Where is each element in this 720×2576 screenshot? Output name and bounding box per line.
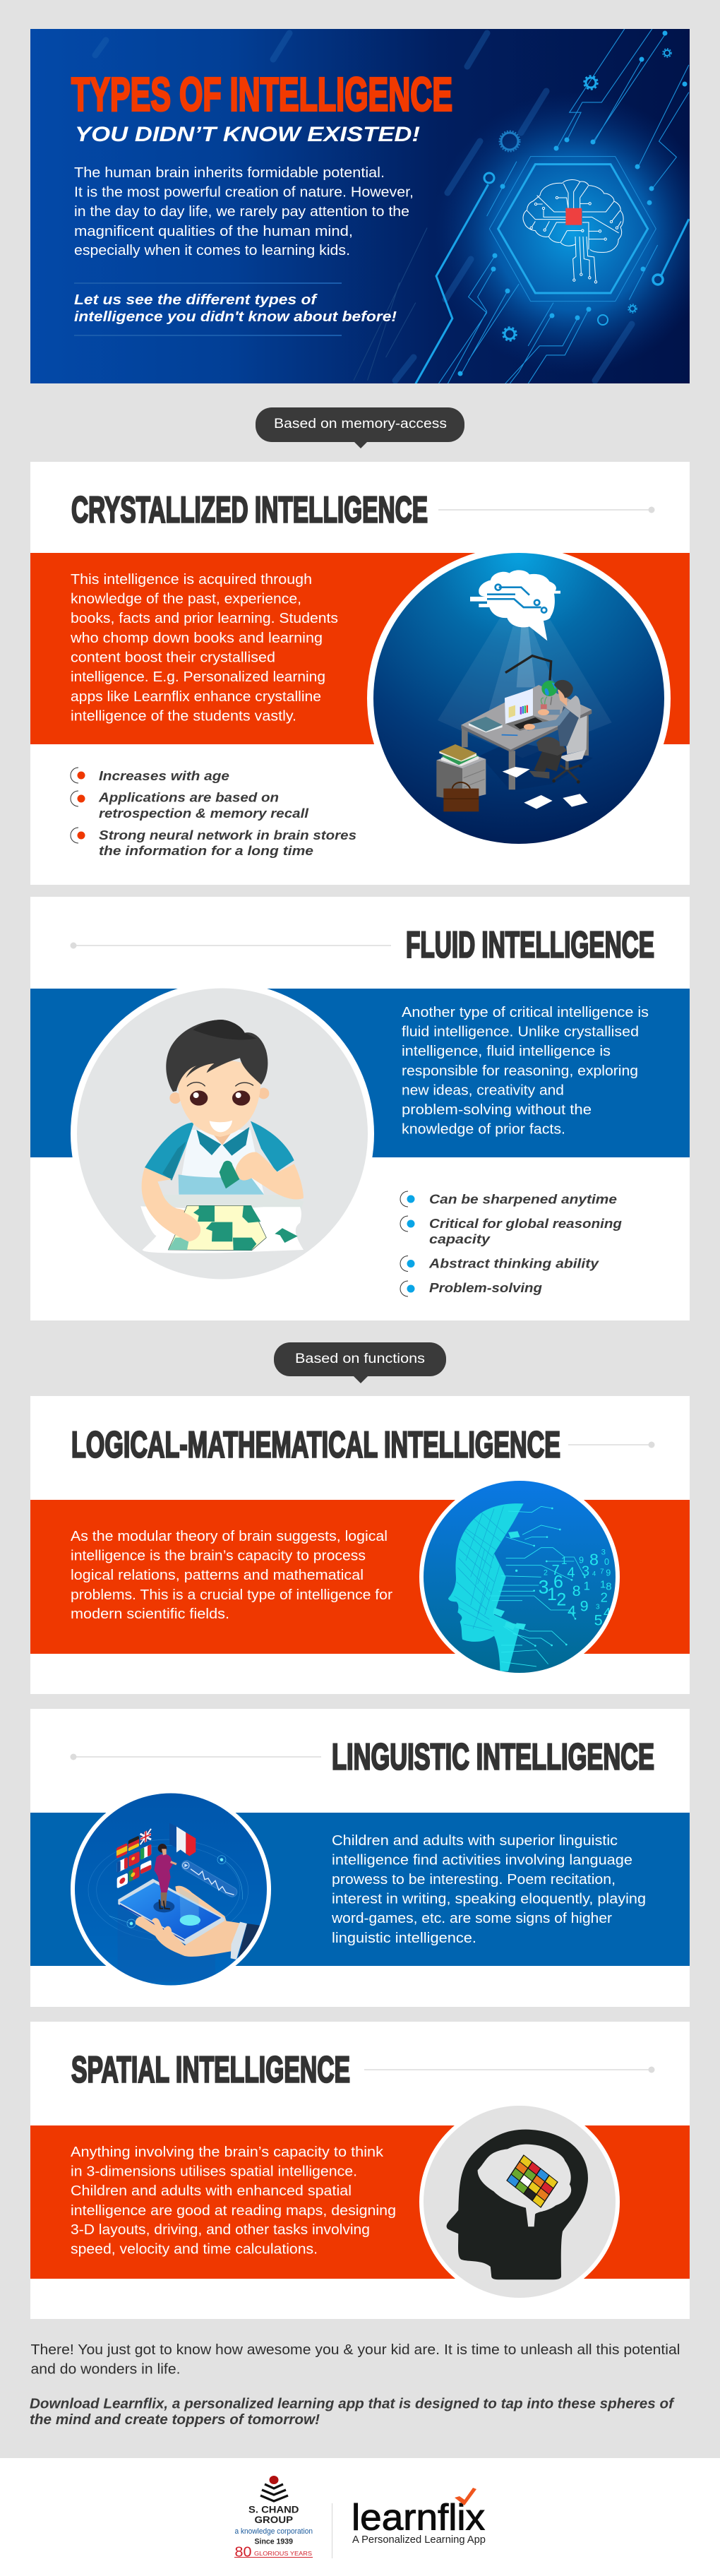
closing text: There! You just got to know how awesome you & your kid are. It is time to unleash all this potential	[31, 2342, 680, 2358]
bullet list: the information for a long time	[99, 843, 313, 858]
briefcase	[452, 782, 470, 789]
hexagon frames	[489, 157, 656, 302]
logo: S. Chand Group: Since 1939	[254, 2538, 293, 2546]
numbers: 8	[589, 1551, 599, 1569]
pill: based on functions	[274, 1342, 446, 1383]
bullet list: Strong neural network in brain stores	[99, 828, 356, 842]
description text: prowess to be interesting. Poem recitation,	[332, 1872, 616, 1888]
description text: intelligence. E.g. Personalized learning	[71, 669, 325, 685]
description text: interest in writing, speaking eloquently, playing	[332, 1892, 646, 1907]
description text: Children and adults with enhanced spatial	[71, 2183, 352, 2199]
description text: intelligence are good at reading maps, designing	[71, 2203, 396, 2219]
student	[539, 751, 558, 772]
bullet list: retrospection & memory recall	[99, 806, 309, 821]
numbers: 8	[606, 1581, 612, 1593]
bullet list: Problem-solving	[429, 1280, 542, 1295]
description text: speed, velocity and time calculations.	[71, 2242, 318, 2258]
laptop	[505, 715, 551, 731]
desk	[462, 715, 589, 789]
bullet list: Abstract thinking ability	[428, 1256, 600, 1271]
description text: responsible for reasoning, exploring	[402, 1063, 638, 1079]
chair	[553, 765, 581, 782]
description text: As the modular theory of brain suggests, logical	[71, 1529, 388, 1544]
numbers: 2	[544, 1569, 548, 1578]
numbers: 4	[567, 1565, 575, 1580]
logo: S. Chand Group: S. CHAND	[248, 2505, 299, 2515]
description text: Children and adults with superior linguistic	[332, 1833, 618, 1849]
numbers: 1	[561, 1555, 567, 1567]
heading: types of intelligence: TYPES OF INTELLIGENCE	[71, 68, 452, 121]
bullet list: capacity	[429, 1232, 491, 1246]
panel: linguistic intelligence	[30, 1709, 690, 2007]
footer: logos	[0, 2458, 720, 2576]
logo: Learnflix: A Personalized Learning App	[352, 2534, 486, 2546]
papers	[503, 767, 588, 809]
description text	[331, 1833, 646, 1946]
illustration: boy solving puzzle	[71, 982, 374, 1285]
description text: linguistic intelligence.	[332, 1931, 476, 1946]
numbers: 4	[592, 1570, 596, 1578]
description text: Another type of critical intelligence is	[402, 1005, 649, 1020]
numbers: 1	[547, 1585, 557, 1604]
pill: based on memory-access: Based on memory-access	[274, 417, 447, 431]
orange band	[30, 2125, 690, 2279]
logo: S. Chand Group: GROUP	[254, 2515, 293, 2525]
hero circuit artwork	[95, 29, 689, 383]
numbers: 3	[601, 1549, 606, 1557]
orange band	[30, 1500, 690, 1654]
logo: Learnflix: learnflix	[352, 2498, 485, 2539]
description text: problems. This is a crucial type of intelligence for	[71, 1587, 392, 1603]
bullet list: Critical for global reasoning	[429, 1216, 622, 1231]
description text: word-games, etc. are some signs of higher	[331, 1911, 612, 1926]
bullet list	[400, 1191, 622, 1296]
description text: This intelligence is acquired through	[71, 572, 312, 588]
description text	[71, 1529, 392, 1622]
numbers: 1	[584, 1580, 590, 1593]
numbers	[539, 1549, 612, 1629]
panel: spatial intelligence	[30, 2022, 690, 2319]
hero intro text: in the day to day life, we rarely pay attention to the	[74, 204, 409, 220]
description text	[71, 2145, 396, 2258]
audio pill	[186, 1866, 232, 1892]
closing text	[30, 2342, 680, 2428]
puzzle	[168, 1205, 266, 1251]
blue band	[30, 989, 690, 1157]
hero intro text: It is the most powerful creation of nature. However,	[74, 185, 414, 201]
pill: based on functions: Based on functions	[295, 1352, 425, 1366]
description text	[70, 572, 338, 724]
numbers: 7	[552, 1563, 560, 1578]
hero call to action: Let us see the different types of	[74, 292, 318, 308]
numbers: 1	[600, 1578, 606, 1590]
numbers: 5	[594, 1611, 603, 1629]
illustration: head silhouette with puzzle cube	[419, 2101, 620, 2302]
hero call to action: intelligence you didn't know about before!	[74, 309, 397, 325]
numbers: 8	[572, 1582, 581, 1599]
illustration: student at desk under thought cloud	[367, 547, 671, 850]
description text: who chomp down books and learning	[70, 631, 323, 646]
hero intro text: especially when it comes to learning kids.	[74, 243, 350, 258]
description text: apps like Learnflix enhance crystalline	[71, 689, 321, 705]
numbers: 4	[568, 1602, 576, 1619]
orange band	[30, 553, 690, 744]
numbers: 0	[604, 1557, 609, 1567]
illustration: digital head with numbers	[419, 1477, 620, 1677]
description text: intelligence, fluid intelligence is	[402, 1044, 611, 1059]
numbers: 3	[582, 1564, 589, 1580]
numbers: 9	[606, 1568, 611, 1578]
logo: S. Chand Group: GLORIOUS YEARS	[254, 2550, 312, 2557]
hero intro text: The human brain inherits formidable potential.	[74, 165, 385, 181]
description text: problem-solving without the	[402, 1102, 592, 1118]
numbers: 9	[580, 1597, 589, 1615]
description text: books, facts and prior learning. Students	[71, 611, 338, 626]
icon: puzzle cube	[507, 2155, 558, 2207]
numbers: 7	[600, 1568, 604, 1575]
woman	[161, 1892, 167, 1907]
description text: logical relations, patterns and mathematical	[71, 1568, 364, 1583]
description text: intelligence find activities involving language	[332, 1853, 632, 1868]
blue band	[30, 1813, 690, 1966]
flags	[140, 1829, 151, 1844]
subheading: YOU DIDN’T KNOW EXISTED!	[75, 123, 420, 146]
numbers: 2	[601, 1590, 608, 1604]
cabinet and books	[436, 751, 486, 768]
closing text: Download Learnflix, a personalized learning app that is designed to tap into these spheres of	[30, 2397, 675, 2412]
heading: CRYSTALLIZED INTELLIGENCE	[71, 490, 428, 531]
closing text: the mind and create toppers of tomorrow!	[30, 2412, 320, 2428]
panel: hero banner	[30, 29, 690, 383]
phone	[118, 1879, 224, 1945]
french flag bookmark	[169, 1823, 176, 1848]
panel: logical-mathematical intelligence	[30, 1396, 690, 1694]
description text: in 3-dimensions utilises spatial intelligence.	[71, 2164, 357, 2180]
logo: S. Chand Group: a knowledge corporation	[234, 2527, 313, 2536]
numbers: 3	[539, 1577, 548, 1598]
hero intro text: magnificent qualities of the human mind,	[74, 224, 353, 239]
globe	[551, 697, 552, 705]
heading: SPATIAL INTELLIGENCE	[71, 2050, 350, 2091]
description text: new ideas, creativity and	[402, 1083, 564, 1099]
description text: knowledge of the past, experience,	[71, 592, 301, 607]
bullet list: Increases with age	[99, 768, 229, 783]
bullet list: Can be sharpened anytime	[429, 1192, 617, 1206]
numbers: 4	[604, 1605, 611, 1620]
description text: Anything involving the brain’s capacity to think	[71, 2145, 384, 2160]
pill: based on memory-access	[256, 407, 464, 448]
numbers: 9	[579, 1555, 584, 1565]
description text: modern scientific fields.	[71, 1606, 229, 1622]
hero call to action	[74, 292, 397, 325]
description text: content boost their crystallised	[71, 650, 275, 665]
panel: crystallized intelligence	[30, 462, 690, 885]
description text: intelligence of the students vastly.	[71, 709, 296, 724]
logo: S. Chand Group	[234, 2476, 313, 2560]
description text: knowledge of prior facts.	[402, 1122, 565, 1138]
lamp	[505, 656, 551, 680]
bullet list	[71, 768, 356, 858]
numbers: 6	[553, 1572, 563, 1592]
hero intro text	[74, 165, 414, 258]
hand back	[175, 1886, 229, 1944]
icon: circuit brain	[523, 180, 623, 283]
illustration: language learning on phone	[71, 1789, 271, 1990]
cloud brain	[470, 570, 560, 640]
numbers: 3	[596, 1603, 600, 1611]
description text: fluid intelligence. Unlike crystallised	[402, 1025, 639, 1040]
closing text: and do wonders in life.	[31, 2362, 181, 2378]
description text: intelligence is the brain’s capacity to process	[71, 1549, 366, 1564]
logo: Learnflix	[352, 2488, 486, 2546]
numbers: 2	[556, 1590, 566, 1609]
description text: 3-D layouts, driving, and other tasks involving	[71, 2222, 370, 2238]
bullet list: Applications are based on	[98, 789, 279, 805]
logo: S. Chand Group: 80	[234, 2545, 251, 2560]
description text	[402, 1005, 649, 1138]
hand front	[136, 1916, 240, 1957]
panel: fluid intelligence	[30, 897, 690, 1320]
book on desk	[469, 717, 503, 732]
